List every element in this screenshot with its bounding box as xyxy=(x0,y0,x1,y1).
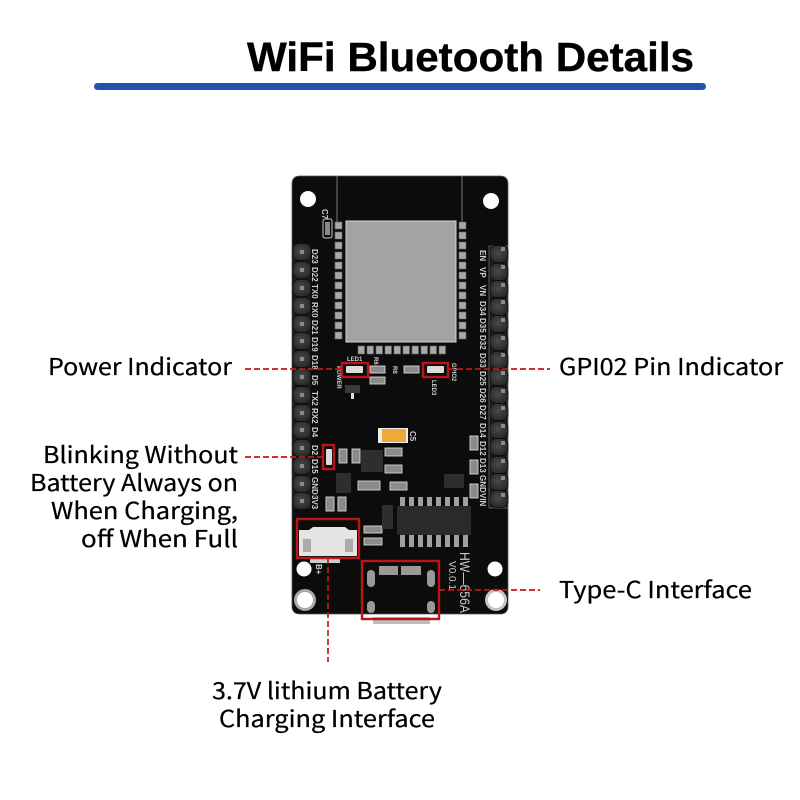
title: WiFi Bluetooth Details xyxy=(247,34,694,80)
right pin labels: VIN xyxy=(478,493,487,507)
small ICs xyxy=(336,450,464,529)
left pin labels xyxy=(310,249,319,510)
right pin labels: D35 xyxy=(478,318,487,333)
callout: battery charging interface xyxy=(212,519,442,734)
silkscreen near LEDs: LED1 xyxy=(347,357,363,363)
left pin labels: D4 xyxy=(310,427,319,438)
silkscreen near LEDs: R6 xyxy=(372,357,378,365)
charging components xyxy=(326,436,478,545)
battery connector xyxy=(299,527,357,575)
tantalum capacitor C5 xyxy=(378,428,417,443)
left pin labels: GND xyxy=(310,477,319,495)
right pin labels: VN xyxy=(478,285,487,296)
right pin labels: D14 xyxy=(478,423,487,438)
USB Type-C area xyxy=(367,566,435,624)
left pin labels: 3V3 xyxy=(310,495,319,510)
left pin labels: RX2 xyxy=(310,408,319,424)
left pin labels: D23 xyxy=(310,249,319,264)
board version silkscreen xyxy=(446,552,473,614)
callout: charging status LED xyxy=(30,436,334,554)
right pin labels: D32 xyxy=(478,335,487,350)
LEDs xyxy=(326,366,444,465)
right pin labels: VP xyxy=(478,267,487,278)
battery connector: B+ xyxy=(314,564,323,575)
tantalum capacitor C5: C5 xyxy=(408,431,417,442)
right pin header xyxy=(489,246,508,508)
callout: GPIO2 indicator xyxy=(423,348,783,382)
WiFi module shield xyxy=(346,221,456,342)
antenna area xyxy=(337,176,462,222)
right pin labels: D33 xyxy=(478,353,487,368)
callout: battery charging interface: Charging Interface xyxy=(219,700,435,734)
right pin labels: D12 xyxy=(478,441,487,456)
callout: charging status LED: When Charging, xyxy=(51,492,238,526)
silkscreen near LEDs: GPIO2 xyxy=(450,363,456,382)
right pin labels: D26 xyxy=(478,388,487,403)
left pin labels: D5 xyxy=(310,375,319,386)
callout: charging status LED: Battery Always on xyxy=(30,464,238,498)
capacitor C7 xyxy=(320,209,332,238)
board version silkscreen: HW—656A xyxy=(457,552,473,614)
left pin labels: D21 xyxy=(310,320,319,335)
ESP32 development board xyxy=(292,176,508,624)
callout: power indicator: Power Indicator xyxy=(48,348,232,382)
silkscreen near LEDs: POWER xyxy=(335,366,341,389)
callout: charging status LED: off When Full xyxy=(81,520,238,554)
transistor Q2 xyxy=(345,385,360,399)
right pin labels: D27 xyxy=(478,405,487,420)
silkscreen near LEDs: R8 xyxy=(391,366,397,374)
WiFi module pads xyxy=(335,222,466,354)
left pin labels: D19 xyxy=(310,337,319,352)
left pin labels: TX0 xyxy=(310,284,319,299)
callout: charging status LED: Blinking Without xyxy=(43,436,238,470)
capacitor C7: C7 xyxy=(320,209,329,220)
right pin labels: EN xyxy=(478,250,487,261)
right pin labels: GND xyxy=(478,475,487,493)
left pin labels: TX2 xyxy=(310,391,319,406)
callout: battery charging interface: 3.7V lithium Battery xyxy=(212,672,442,706)
board version silkscreen: V0.0.1 xyxy=(446,561,457,590)
main IC xyxy=(397,497,471,547)
right pin labels: D13 xyxy=(478,458,487,473)
left pin labels: D2 xyxy=(310,445,319,456)
left pin labels: D22 xyxy=(310,267,319,282)
callout: Type-C interface: Type-C Interface xyxy=(559,571,752,605)
left pin labels: RX0 xyxy=(310,302,319,318)
callout: power indicator xyxy=(48,348,368,382)
small components near LEDs xyxy=(370,366,419,384)
silkscreen near LEDs: LED3 xyxy=(430,380,436,396)
right pin labels xyxy=(478,250,487,507)
callout: Type-C interface xyxy=(362,561,752,619)
right pin labels: D34 xyxy=(478,301,487,316)
mounting holes xyxy=(296,191,506,610)
left pin labels: D15 xyxy=(310,459,319,474)
callout: GPIO2 indicator: GPI02 Pin Indicator xyxy=(559,348,783,382)
right pin labels: D25 xyxy=(478,371,487,386)
left pin header xyxy=(293,244,311,510)
left pin labels: D18 xyxy=(310,355,319,370)
board body xyxy=(292,176,508,614)
title underline xyxy=(94,83,706,90)
silkscreen near LEDs xyxy=(335,357,456,396)
